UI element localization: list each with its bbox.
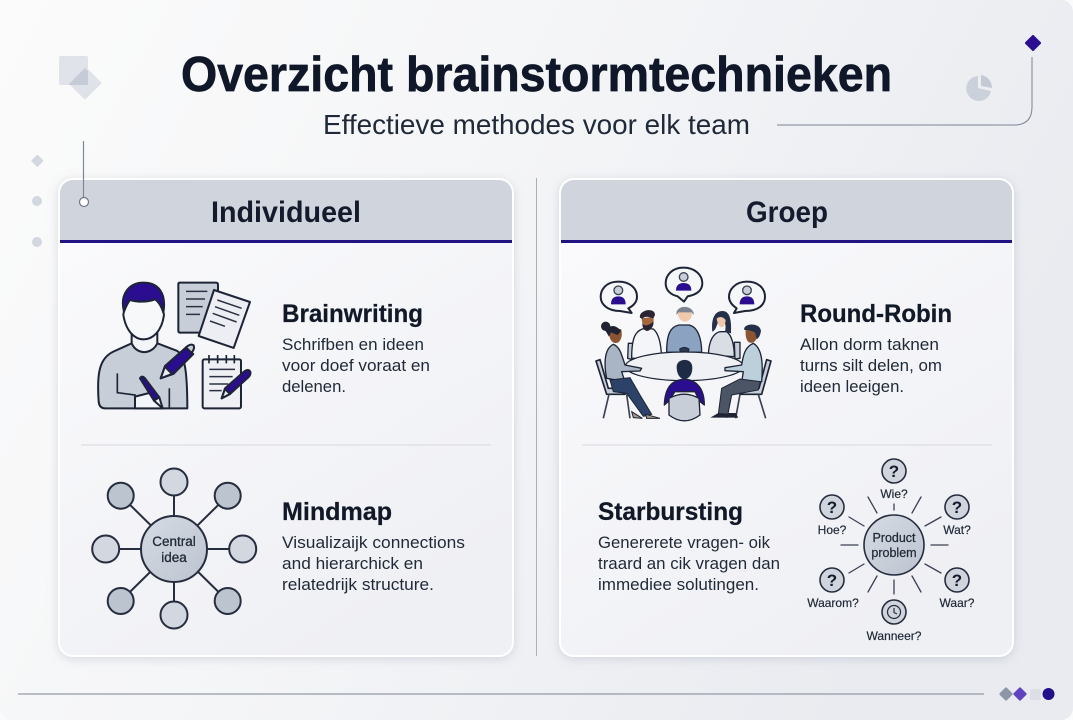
title: Overzicht brainstormtechnieken xyxy=(181,48,892,102)
text: Round-Robin description: Allon dorm taknen xyxy=(800,336,939,354)
panel: Groep xyxy=(560,179,1013,656)
question: Wat xyxy=(943,495,971,537)
text: Round-Robin description: turns silt delen, om xyxy=(800,357,942,375)
text: Brainwriting description: Schrifben en ideen xyxy=(282,336,424,354)
question: Wat: ? xyxy=(952,498,962,517)
speech bubbles xyxy=(601,268,765,313)
heading: Starbursting: Starbursting xyxy=(598,498,743,526)
question: Wie xyxy=(880,459,908,501)
text: Mindmap description: and hierarchick en xyxy=(282,555,423,573)
diagram: starbursting xyxy=(807,459,975,643)
center node xyxy=(864,515,924,575)
question: Wie: ? xyxy=(889,462,899,481)
question: Hoe xyxy=(818,495,847,537)
icon: person brainwriting xyxy=(98,283,250,408)
text: Round-Robin description xyxy=(800,336,942,396)
icon: mindmap: idea xyxy=(161,550,187,565)
center node: Product xyxy=(872,531,916,545)
left and right people xyxy=(596,322,771,418)
panel header: Groep: Groep xyxy=(746,196,828,229)
question: Wat: Wat? xyxy=(943,523,971,537)
panel header: Individueel: Individueel xyxy=(211,196,361,229)
text: Mindmap description: relatedrijk structure. xyxy=(282,576,434,594)
question: Wanneer: Wanneer? xyxy=(867,629,922,643)
text: Brainwriting description xyxy=(282,336,430,396)
decoration: overlapping square and diamond xyxy=(59,56,102,100)
question: Waarom: Waarom? xyxy=(807,596,859,610)
question: Waarom: ? xyxy=(827,571,837,590)
question: Hoe: ? xyxy=(827,498,837,517)
text: Mindmap description: Visualizaijk connections xyxy=(282,534,465,552)
heading: Round-Robin: Round-Robin xyxy=(800,300,952,328)
decoration: connector with navy diamond xyxy=(777,35,1041,125)
rays xyxy=(841,497,948,594)
subtitle: Effectieve methodes voor elk team xyxy=(323,109,750,140)
center node: problem xyxy=(871,546,917,560)
text: Brainwriting description: voor doef voraat en xyxy=(282,357,430,375)
center divider xyxy=(536,178,538,656)
back row people xyxy=(628,307,740,360)
footer rule xyxy=(18,693,984,695)
question: Waar: Waar? xyxy=(940,596,975,610)
question: Waarom xyxy=(807,568,859,610)
icon: mindmap: Central xyxy=(152,534,196,549)
text: Round-Robin description: ideen leeigen. xyxy=(800,378,904,396)
decoration: left side markers xyxy=(31,154,44,247)
decoration: connector line into Individueel header xyxy=(80,141,88,206)
heading: Mindmap: Mindmap xyxy=(282,498,392,526)
text: Mindmap description xyxy=(282,534,465,594)
panel header: Individueel xyxy=(60,180,512,243)
panel: Individueel xyxy=(59,179,513,656)
text: Starbursting description: traard an cik vragen dan xyxy=(598,555,780,573)
text: Starbursting description: immediee solutingen. xyxy=(598,576,759,594)
question: Wanneer xyxy=(867,600,922,643)
footer markers xyxy=(999,687,1054,701)
table xyxy=(625,352,743,381)
icon: mindmap xyxy=(92,468,256,628)
text: Starbursting description: Genererete vragen- oik xyxy=(598,534,771,552)
question: Wie: Wie? xyxy=(880,487,908,501)
front person xyxy=(664,360,704,421)
decoration: pie chart icon xyxy=(966,75,992,101)
panel header: Groep xyxy=(561,180,1012,243)
question: Hoe: Hoe? xyxy=(818,523,847,537)
heading: Brainwriting: Brainwriting xyxy=(282,300,423,328)
text: Brainwriting description: delenen. xyxy=(282,378,346,396)
icon: team around table xyxy=(596,268,771,421)
text: Starbursting description xyxy=(598,534,780,594)
question: Waar xyxy=(940,568,975,610)
question: Waar: ? xyxy=(952,571,962,590)
